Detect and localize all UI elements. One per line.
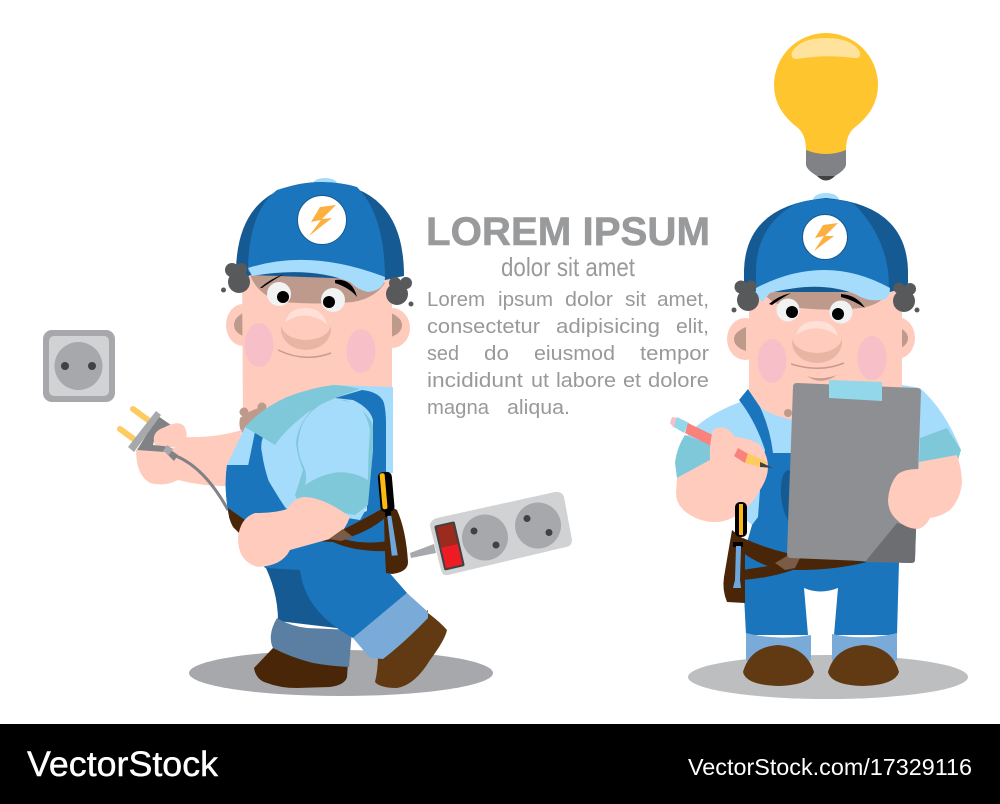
body text: consectetur	[427, 316, 540, 338]
mouth	[791, 363, 844, 368]
bib	[739, 389, 800, 560]
socket holes	[462, 502, 561, 560]
mouth	[278, 350, 331, 357]
right sleeve	[919, 428, 961, 464]
chin	[807, 375, 837, 381]
clipboard tape	[829, 380, 882, 401]
cap panel	[756, 199, 889, 290]
nose	[281, 308, 331, 350]
back trouser cuff	[271, 618, 352, 667]
sleeve crease	[295, 400, 373, 515]
legs	[742, 555, 899, 635]
torso and overalls	[226, 465, 407, 638]
cap	[744, 198, 908, 292]
eyebrows	[260, 274, 357, 297]
body text: magna	[427, 397, 490, 419]
cap logo	[802, 214, 848, 260]
footer url: VectorStock.com/17329116	[688, 754, 972, 780]
footer logo: VectorStock	[27, 745, 219, 784]
hair band	[250, 270, 385, 304]
icon: plug	[120, 409, 178, 461]
right ear	[374, 308, 410, 348]
left ear	[226, 304, 260, 346]
overall strap left	[226, 432, 287, 512]
body text: ipsum	[498, 289, 553, 311]
strip body	[430, 492, 572, 575]
back arm and palm	[136, 430, 242, 486]
cap visor	[248, 260, 385, 292]
face	[242, 270, 392, 425]
head	[221, 178, 414, 434]
subheading: dolor sit amet	[501, 252, 636, 282]
cheeks	[758, 336, 886, 383]
icon: wall socket	[43, 330, 115, 402]
plug cable	[176, 456, 228, 510]
neck detail	[239, 402, 268, 434]
body text: amet,	[657, 289, 709, 311]
right cuff	[832, 633, 897, 665]
belt crossing highlight	[329, 529, 353, 541]
shadow: right worker	[688, 655, 968, 699]
eyebrows	[769, 293, 865, 308]
front shoe	[375, 610, 447, 688]
footer bar	[0, 724, 1000, 804]
left shoe	[743, 645, 814, 686]
shirt collar	[245, 385, 360, 445]
neck mole	[784, 409, 792, 417]
cap button	[312, 178, 338, 192]
pencil tip	[734, 448, 773, 468]
body text: dolore	[648, 370, 709, 392]
left sleeve	[675, 435, 712, 478]
right shoe	[828, 645, 899, 686]
sleeve	[298, 400, 370, 485]
belt highlight	[775, 556, 800, 570]
belt	[228, 507, 387, 551]
shadow: left worker	[189, 650, 493, 696]
bib shadow	[781, 470, 790, 520]
screwdriver	[377, 471, 399, 556]
body text: eiusmod	[534, 343, 615, 365]
clipboard folded corner	[865, 523, 916, 563]
pencil tail	[670, 417, 723, 447]
overall strap right	[335, 390, 386, 520]
body text: sit	[625, 289, 646, 311]
hair band	[760, 278, 892, 310]
cap logo	[298, 196, 346, 244]
back leg	[262, 560, 345, 629]
body text	[427, 289, 709, 419]
body text: do	[484, 343, 509, 365]
cheeks	[244, 323, 376, 373]
body text: ut	[531, 370, 549, 392]
cap panel	[248, 182, 385, 280]
body text: Lorem	[427, 289, 485, 311]
cap	[236, 182, 404, 285]
cap button	[813, 193, 839, 207]
body text: adipisicing	[556, 316, 660, 338]
power strip	[410, 492, 572, 575]
body text: labore	[556, 370, 616, 392]
head	[727, 193, 920, 420]
front arm	[238, 497, 350, 567]
eyes	[776, 298, 852, 324]
left hair	[732, 280, 759, 312]
tool holster	[723, 530, 745, 603]
left cuff	[746, 633, 811, 665]
red switch	[434, 521, 465, 571]
strip cable	[410, 544, 436, 558]
body text: tempor	[640, 343, 709, 365]
screwdriver	[733, 502, 747, 588]
body text: aliqua.	[507, 397, 570, 419]
body text: sed	[427, 343, 459, 365]
face and neck	[749, 285, 902, 420]
body text: dolor	[565, 289, 613, 311]
right ear	[879, 317, 915, 359]
right arm and hand	[888, 455, 962, 529]
heading: LOREM IPSUM	[426, 210, 710, 254]
left hair	[221, 263, 250, 293]
tool holster	[384, 503, 408, 574]
front trouser cuff	[353, 593, 428, 659]
left ear	[727, 318, 763, 360]
right worker	[670, 193, 962, 686]
body text: incididunt	[427, 370, 523, 392]
body text: elit,	[676, 316, 709, 338]
torso shirt	[675, 385, 961, 525]
back shoe	[254, 648, 348, 688]
left arm	[676, 427, 768, 522]
hand thumb	[154, 423, 187, 448]
icon: light bulb	[774, 33, 878, 180]
belt straps	[742, 538, 867, 580]
clipboard	[787, 380, 921, 563]
plug collar	[163, 445, 173, 455]
cap visor	[756, 270, 890, 302]
body text: et	[623, 370, 641, 392]
eyes	[267, 282, 345, 312]
nose	[792, 321, 842, 363]
shirt	[227, 385, 393, 520]
right hair	[893, 282, 920, 312]
right hair	[386, 277, 414, 306]
left worker	[120, 178, 447, 688]
